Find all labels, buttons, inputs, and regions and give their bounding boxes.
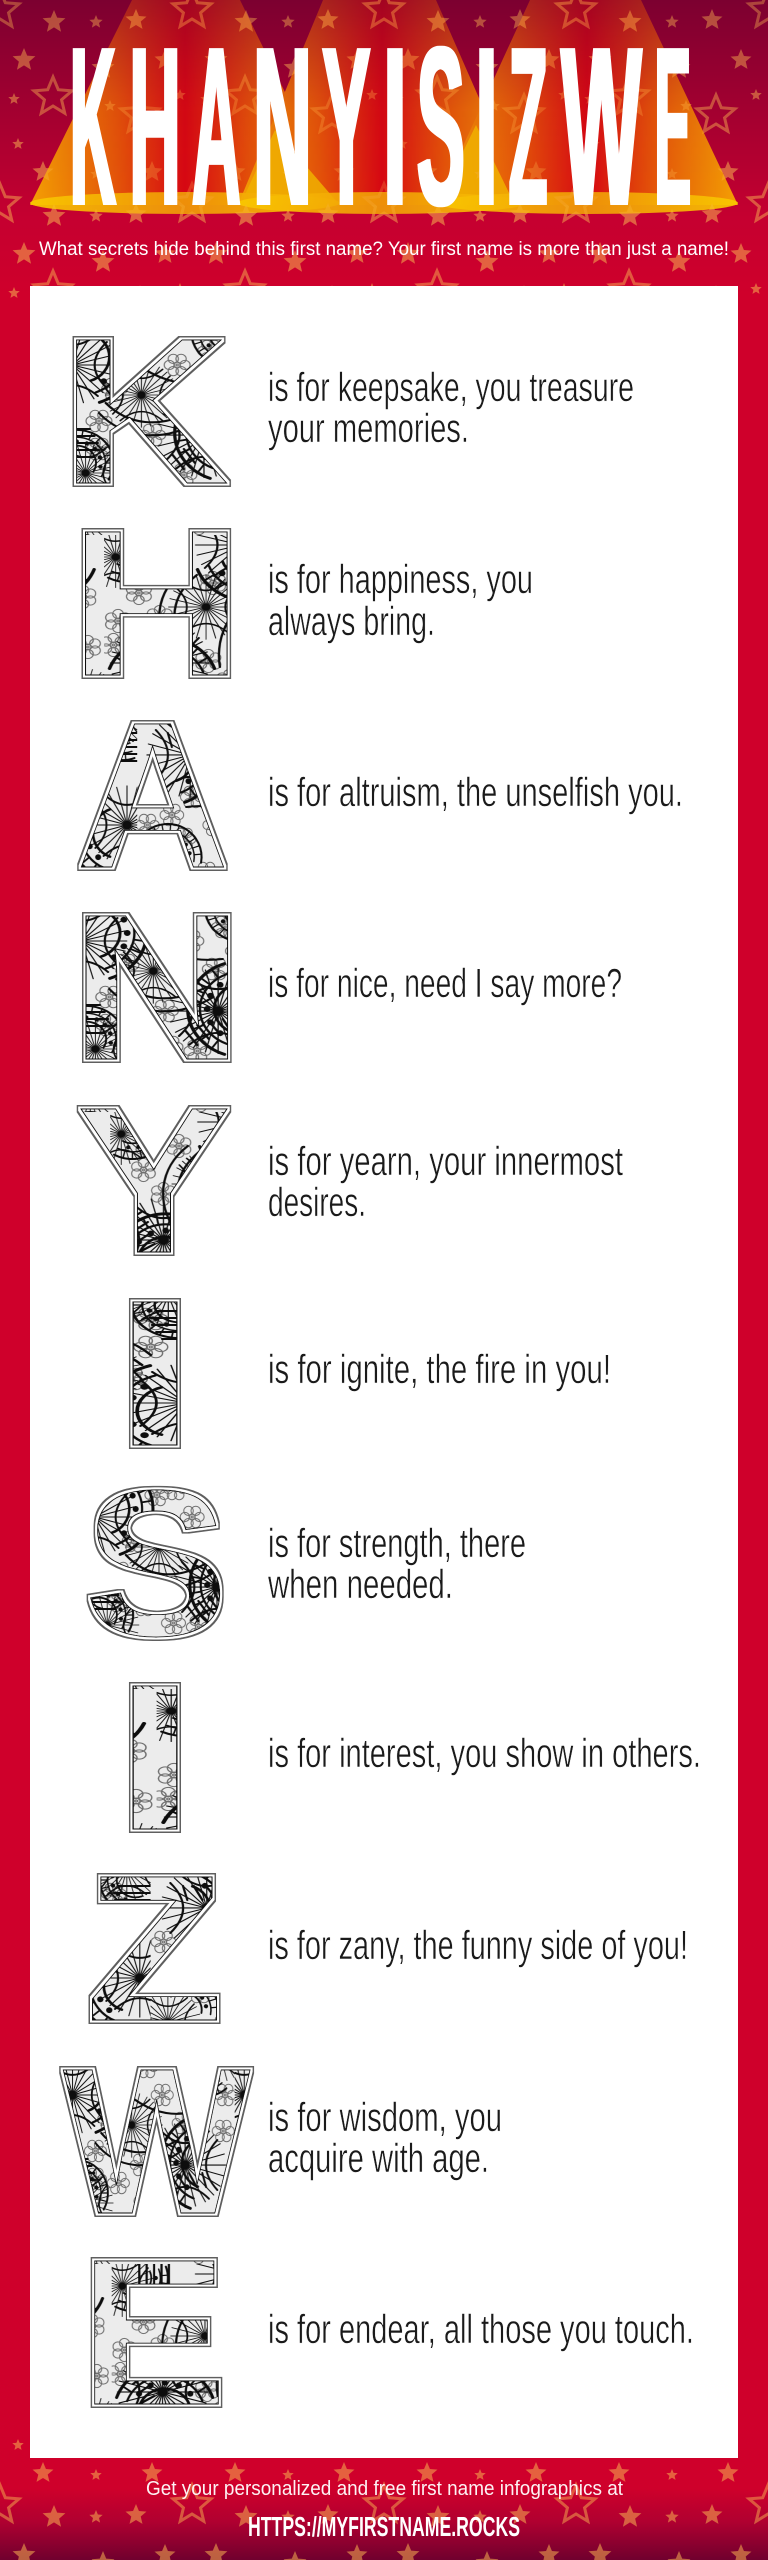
row E <box>80 2217 694 2449</box>
stars showing through the spotlights <box>44 0 726 214</box>
text: Y meaning <box>268 1138 623 1225</box>
title: I <box>475 0 498 254</box>
title: Z <box>509 0 547 254</box>
star pattern top <box>0 0 768 300</box>
text: W meaning <box>268 2094 502 2181</box>
icon: letter K: K <box>61 294 229 527</box>
title: K <box>70 0 116 254</box>
title: H <box>130 0 181 254</box>
panel: white content card <box>30 286 738 2458</box>
spotlights <box>30 0 738 214</box>
title: Y <box>322 0 371 253</box>
text: N meaning: is for nice, need I say more? <box>268 960 622 1006</box>
text: I meaning: is for ignite, the fire in you! <box>268 1346 611 1392</box>
text: H meaning: is for happiness, you <box>268 556 533 602</box>
row I <box>113 1257 611 1490</box>
icon: letter W: W <box>63 2026 250 2258</box>
row K <box>61 294 634 527</box>
icon: letter H: H <box>69 486 243 719</box>
text: Y meaning: is for yearn, your innermost <box>268 1138 623 1184</box>
icon: letter I: I <box>113 1257 197 1490</box>
icon: letter Y: Y <box>77 1063 231 1297</box>
row A <box>76 679 683 912</box>
text: H meaning: always bring. <box>268 598 435 644</box>
icon: letter A: A <box>76 679 229 912</box>
title: S <box>417 0 465 254</box>
star pattern bottom <box>0 2435 768 2560</box>
row H <box>69 486 533 719</box>
title: E <box>655 0 691 255</box>
icon: letter Z: Z <box>86 1832 223 2064</box>
text: K meaning: your memories. <box>268 405 469 451</box>
text: W meaning: acquire with age. <box>268 2135 489 2181</box>
row Z <box>86 1832 688 2064</box>
text: H meaning <box>268 556 533 644</box>
row I second <box>113 1641 701 1874</box>
text: K meaning <box>268 364 634 451</box>
footer url: HTTPS://MYFIRSTNAME.ROCKS <box>248 2511 520 2542</box>
text: S meaning <box>267 1520 526 1607</box>
icon: letter I: I <box>113 1641 197 1874</box>
icon: letter S: S <box>84 1446 228 1679</box>
text: S meaning: is for strength, there <box>268 1520 526 1566</box>
icon: letter N: N <box>70 870 244 1103</box>
title: W <box>561 0 642 254</box>
title: N <box>253 0 312 254</box>
text: S meaning: when needed. <box>267 1561 453 1607</box>
row W <box>63 2026 502 2258</box>
row Y <box>77 1063 623 1297</box>
title: I <box>383 0 407 254</box>
row N <box>70 870 622 1103</box>
title <box>70 0 691 255</box>
footer call to action: Get your personalized and free first name infographics at <box>146 2478 623 2500</box>
icon: letter E: E <box>80 2217 227 2449</box>
text: W meaning: is for wisdom, you <box>268 2094 502 2140</box>
title: A <box>192 0 241 254</box>
row S <box>84 1446 526 1679</box>
tagline: What secrets hide behind this first name? Your first name is more than just a name! <box>39 239 729 260</box>
text: Y meaning: desires. <box>268 1179 366 1225</box>
